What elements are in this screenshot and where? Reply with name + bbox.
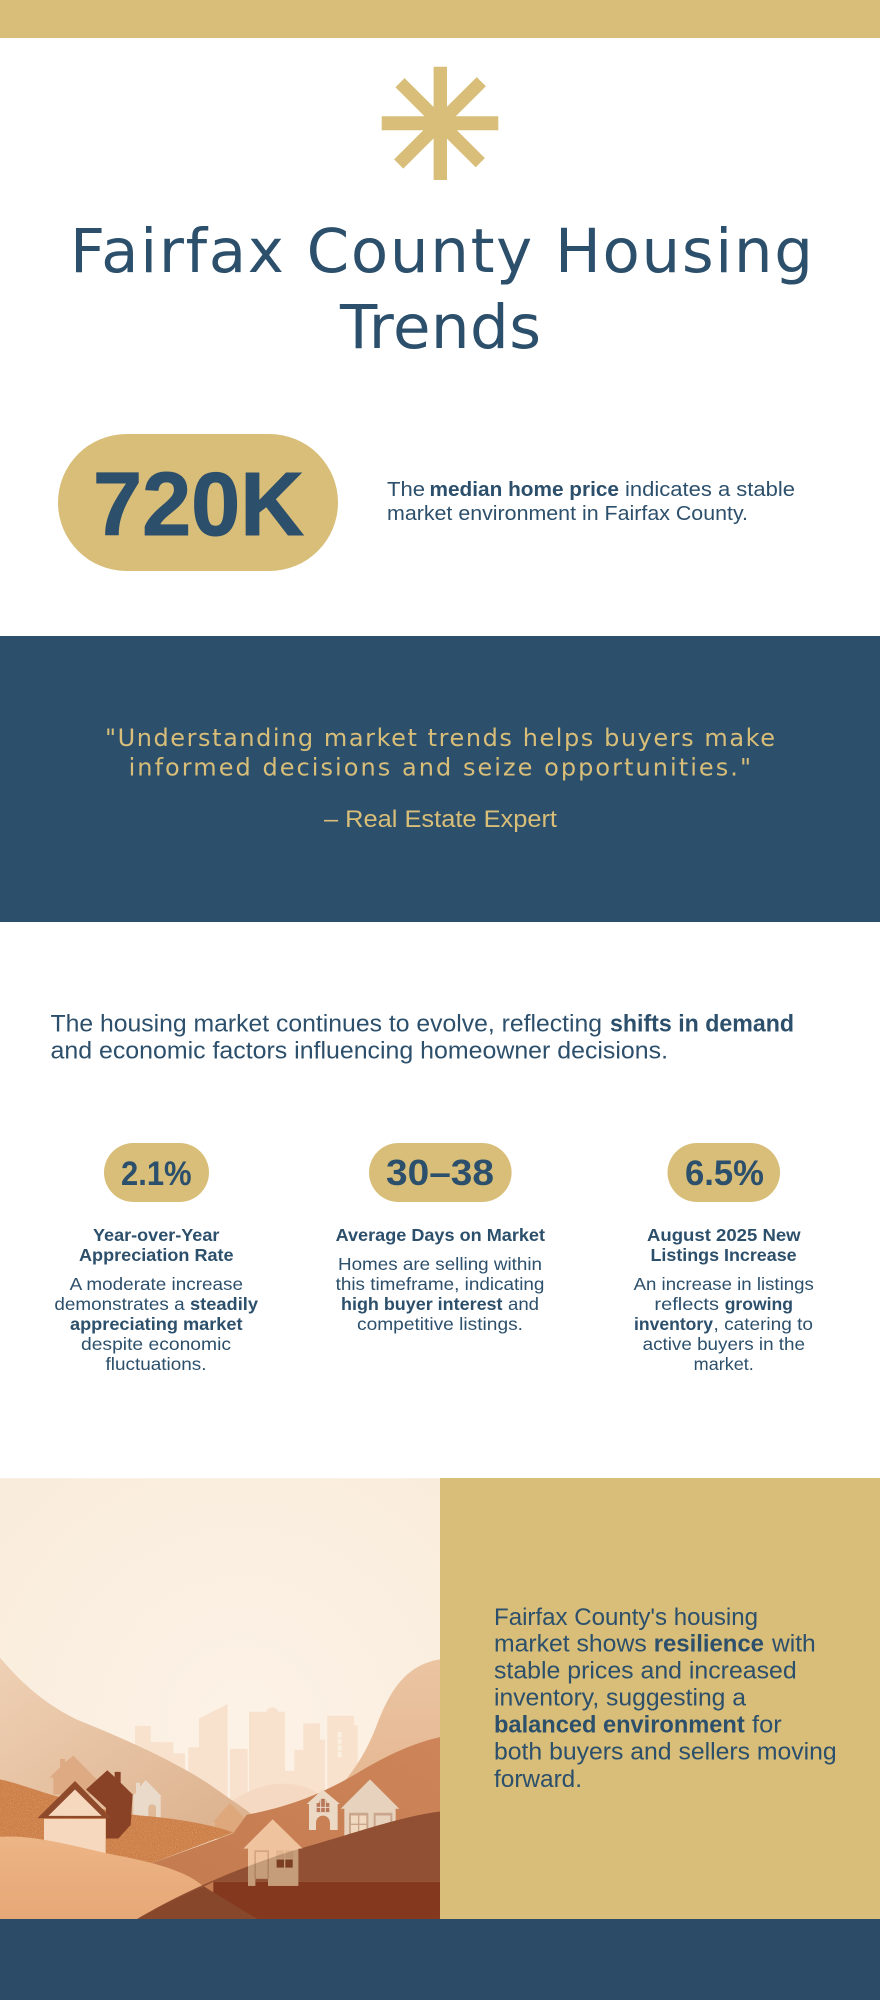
title: Trends bbox=[339, 292, 541, 363]
text: median price description: market environment in Fairfax County. bbox=[387, 503, 748, 525]
text: new listings description: An increase in listings bbox=[634, 1274, 814, 1294]
quote text: "Understanding market trends helps buyers make bbox=[105, 724, 775, 752]
intro paragraph bbox=[50, 1011, 794, 1065]
house: pale arched bbox=[307, 1789, 340, 1830]
right orange hill bbox=[152, 1737, 440, 1892]
text: median price description: The bbox=[387, 479, 425, 501]
text: summary paragraph: balanced environment bbox=[494, 1712, 745, 1739]
panel: gold summary bbox=[440, 1478, 880, 1919]
house: pale small bbox=[132, 1780, 162, 1818]
back right hill bbox=[346, 1659, 440, 1780]
title: Fairfax County Housing bbox=[70, 216, 813, 287]
bottom band bbox=[213, 1882, 440, 1919]
text: summary paragraph: with bbox=[771, 1630, 816, 1658]
front left hill bbox=[0, 1837, 257, 1919]
text: appreciation description: A moderate increase bbox=[70, 1274, 243, 1294]
text: days on market description: competitive listings. bbox=[357, 1314, 523, 1334]
heading: August 2025 New Listings Increase: August 2025 New bbox=[647, 1225, 801, 1245]
house: front with white gable bbox=[38, 1781, 106, 1853]
house: tan small center bbox=[214, 1803, 244, 1834]
text: appreciation description: fluctuations. bbox=[106, 1354, 206, 1374]
intro paragraph: The housing market continues to evolve, reflecting bbox=[50, 1011, 602, 1038]
text: summary paragraph: for bbox=[752, 1712, 782, 1739]
pill: 720K bbox=[58, 434, 338, 571]
text: new listings description: growing bbox=[725, 1294, 793, 1314]
text: summary paragraph: forward. bbox=[494, 1766, 582, 1793]
intro paragraph: shifts in demand bbox=[610, 1011, 794, 1038]
text: median price description bbox=[387, 479, 795, 525]
quote text: informed decisions and seize opportunities." bbox=[129, 754, 751, 782]
heading: August 2025 New Listings Increase: Listings Increase bbox=[650, 1245, 797, 1265]
text: new listings description: reflects bbox=[654, 1294, 719, 1314]
pill: 30–38 bbox=[369, 1143, 512, 1202]
back left hill bbox=[0, 1658, 257, 1842]
text: summary paragraph: market shows bbox=[494, 1630, 647, 1658]
text: new listings description bbox=[634, 1274, 814, 1374]
left orange hill bbox=[0, 1779, 233, 1864]
text: appreciation description: steadily bbox=[190, 1294, 258, 1314]
text: days on market description bbox=[336, 1254, 544, 1334]
text: summary paragraph: resilience bbox=[654, 1630, 764, 1658]
panel: stat 2.1% appreciation bbox=[54, 1143, 258, 1374]
quote text bbox=[105, 724, 775, 782]
text: summary paragraph: stable prices and increased bbox=[494, 1658, 797, 1685]
pill: 6.5% bbox=[668, 1143, 780, 1202]
intro paragraph: and economic factors influencing homeowner decisions. bbox=[50, 1038, 668, 1065]
text: summary paragraph bbox=[494, 1604, 837, 1793]
stat: median home price bbox=[58, 434, 795, 571]
pill: 2.1%: 2.1% bbox=[121, 1155, 192, 1193]
illustration: hills, houses and city skyline bbox=[0, 1478, 440, 1919]
house: center foreground bbox=[244, 1819, 302, 1886]
panel: quote banner bbox=[0, 636, 880, 922]
text: appreciation description bbox=[54, 1274, 258, 1374]
text: appreciation description: demonstrates a bbox=[54, 1294, 185, 1314]
panel: stat 6.5% new listings bbox=[634, 1143, 814, 1374]
heading: Year-over-Year Appreciation Rate: Appreciation Rate bbox=[79, 1245, 234, 1265]
pill: 2.1% bbox=[104, 1143, 209, 1202]
text: appreciation description: despite economic bbox=[81, 1334, 231, 1354]
text: days on market description: this timeframe, indicating bbox=[336, 1274, 544, 1294]
icon: gold asterisk bbox=[382, 67, 498, 180]
text: appreciation description: appreciating market bbox=[70, 1314, 243, 1334]
house: tan back left bbox=[49, 1756, 97, 1795]
footer navy bar bbox=[0, 1919, 880, 2000]
pill: 6.5%: 6.5% bbox=[685, 1154, 764, 1193]
text: new listings description: market. bbox=[694, 1354, 754, 1374]
text: days on market description: Homes are selling within bbox=[338, 1254, 542, 1274]
quote attribution: – Real Estate Expert bbox=[324, 806, 557, 833]
house: pale large right bbox=[341, 1779, 399, 1842]
heading: Year-over-Year Appreciation Rate bbox=[79, 1225, 234, 1265]
top gold bar bbox=[0, 0, 880, 38]
panel: stat 30–38 days on market bbox=[336, 1143, 545, 1334]
text: days on market description: high buyer interest bbox=[341, 1294, 503, 1314]
heading: Year-over-Year Appreciation Rate: Year-over-Year bbox=[93, 1225, 220, 1245]
dark foreground hill bbox=[137, 1811, 440, 1919]
pill: 30–38: 30–38 bbox=[386, 1152, 494, 1193]
pill: 720K: 720K bbox=[93, 455, 304, 555]
city skyline bbox=[135, 1704, 358, 1808]
text: new listings description: , catering to bbox=[714, 1314, 813, 1334]
text: median price description: indicates a stable bbox=[625, 479, 795, 501]
text: new listings description: inventory bbox=[634, 1314, 713, 1334]
heading: Average Days on Market: Average Days on Market bbox=[336, 1225, 545, 1245]
text: new listings description: active buyers in the bbox=[643, 1334, 805, 1354]
text: summary paragraph: both buyers and sellers moving bbox=[494, 1739, 837, 1766]
text: median price description: median home price bbox=[430, 479, 619, 501]
text: summary paragraph: Fairfax County's housing bbox=[494, 1604, 758, 1631]
title bbox=[70, 216, 813, 363]
distant center hill bbox=[233, 1784, 318, 1814]
text: days on market description: and bbox=[508, 1294, 539, 1314]
house: dark brown bbox=[86, 1770, 133, 1838]
text: summary paragraph: inventory, suggesting a bbox=[494, 1685, 747, 1712]
heading: August 2025 New Listings Increase bbox=[647, 1225, 801, 1265]
